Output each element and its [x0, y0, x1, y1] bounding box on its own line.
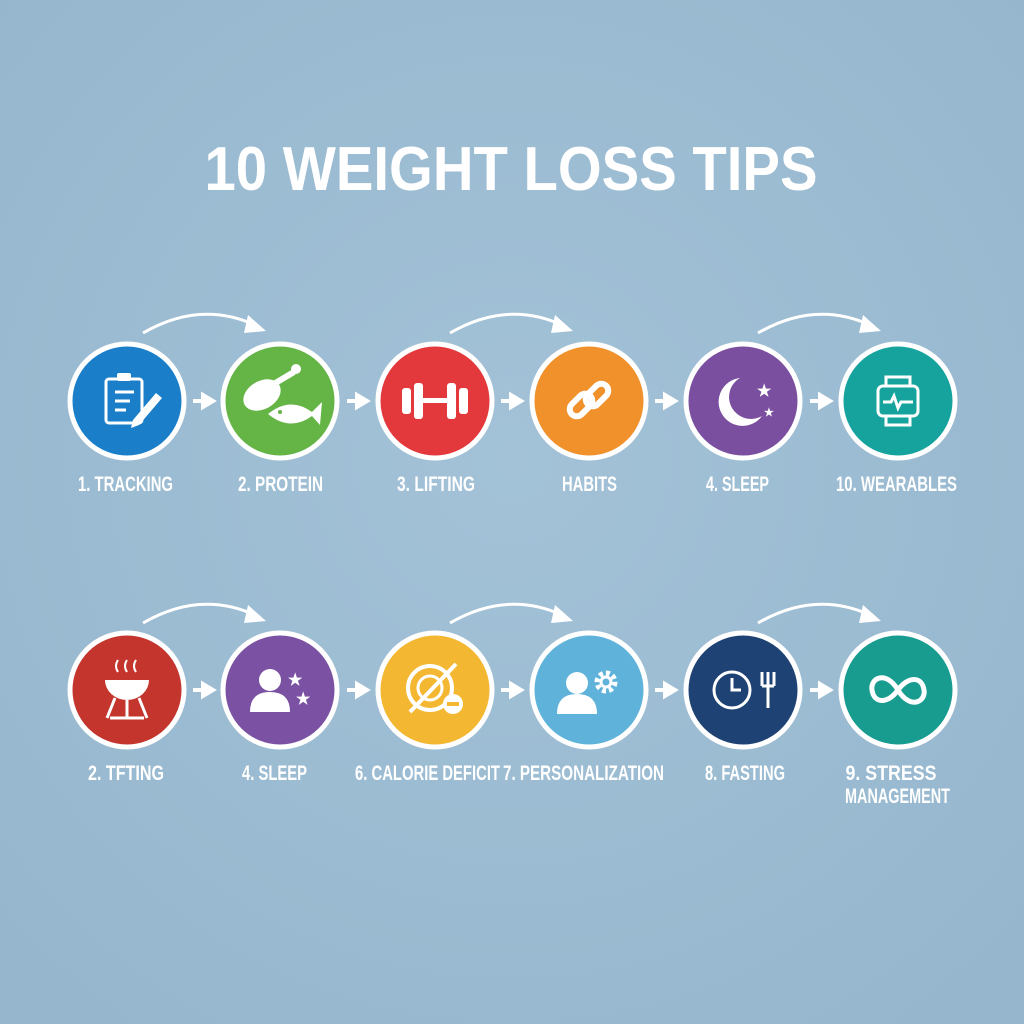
circle: personalization [532, 633, 646, 747]
circle: grill [70, 633, 184, 747]
row 1 curved arrows [143, 314, 881, 333]
labels row 1: 10. WEARABLES [836, 473, 957, 496]
labels row 2: MANAGEMENT [845, 785, 950, 808]
labels row 1: 4. SLEEP [706, 473, 769, 496]
circle: lifting [378, 344, 492, 458]
arrow [193, 684, 213, 696]
title: 10 WEIGHT LOSS TIPS [204, 135, 818, 204]
circle: tracking [70, 344, 184, 458]
labels row 1: HABITS [562, 473, 617, 496]
circle: sleep: ★ [764, 407, 774, 419]
circle: person stars: ★ [288, 672, 303, 689]
circle: protein [223, 344, 337, 458]
circle: sleep: ★ [757, 383, 772, 400]
arrow [810, 684, 830, 696]
labels row 2 [88, 762, 950, 808]
labels row 1: 1. TRACKING [78, 473, 173, 496]
arrow [810, 395, 830, 407]
labels row 2: 4. SLEEP [242, 762, 307, 785]
arrow [655, 395, 675, 407]
arrow [655, 684, 675, 696]
circle: fasting [686, 633, 800, 747]
labels row 2: 8. FASTING [705, 762, 785, 785]
labels row 2: 6. CALORIE DEFICIT [355, 762, 500, 785]
labels row 2: 7. PERSONALIZATION [503, 762, 664, 785]
arrow [347, 395, 367, 407]
labels row 1: 3. LIFTING [397, 473, 475, 496]
circle: wearables [841, 344, 955, 458]
circle: habits [532, 344, 646, 458]
labels row 2: 2. TFTING [88, 762, 164, 785]
arrow [501, 395, 521, 407]
circle: calorie deficit [378, 633, 492, 747]
row 2 curved arrows [143, 604, 881, 623]
labels row 2: 9. STRESS [846, 762, 936, 785]
circle: person stars [223, 633, 337, 747]
circle: stress management [841, 633, 955, 747]
arrow [347, 684, 367, 696]
arrow [501, 684, 521, 696]
circle: sleep [686, 344, 800, 458]
labels row 1 [78, 473, 957, 496]
circle: person stars: ★ [296, 691, 311, 708]
arrow [193, 395, 213, 407]
labels row 1: 2. PROTEIN [238, 473, 323, 496]
